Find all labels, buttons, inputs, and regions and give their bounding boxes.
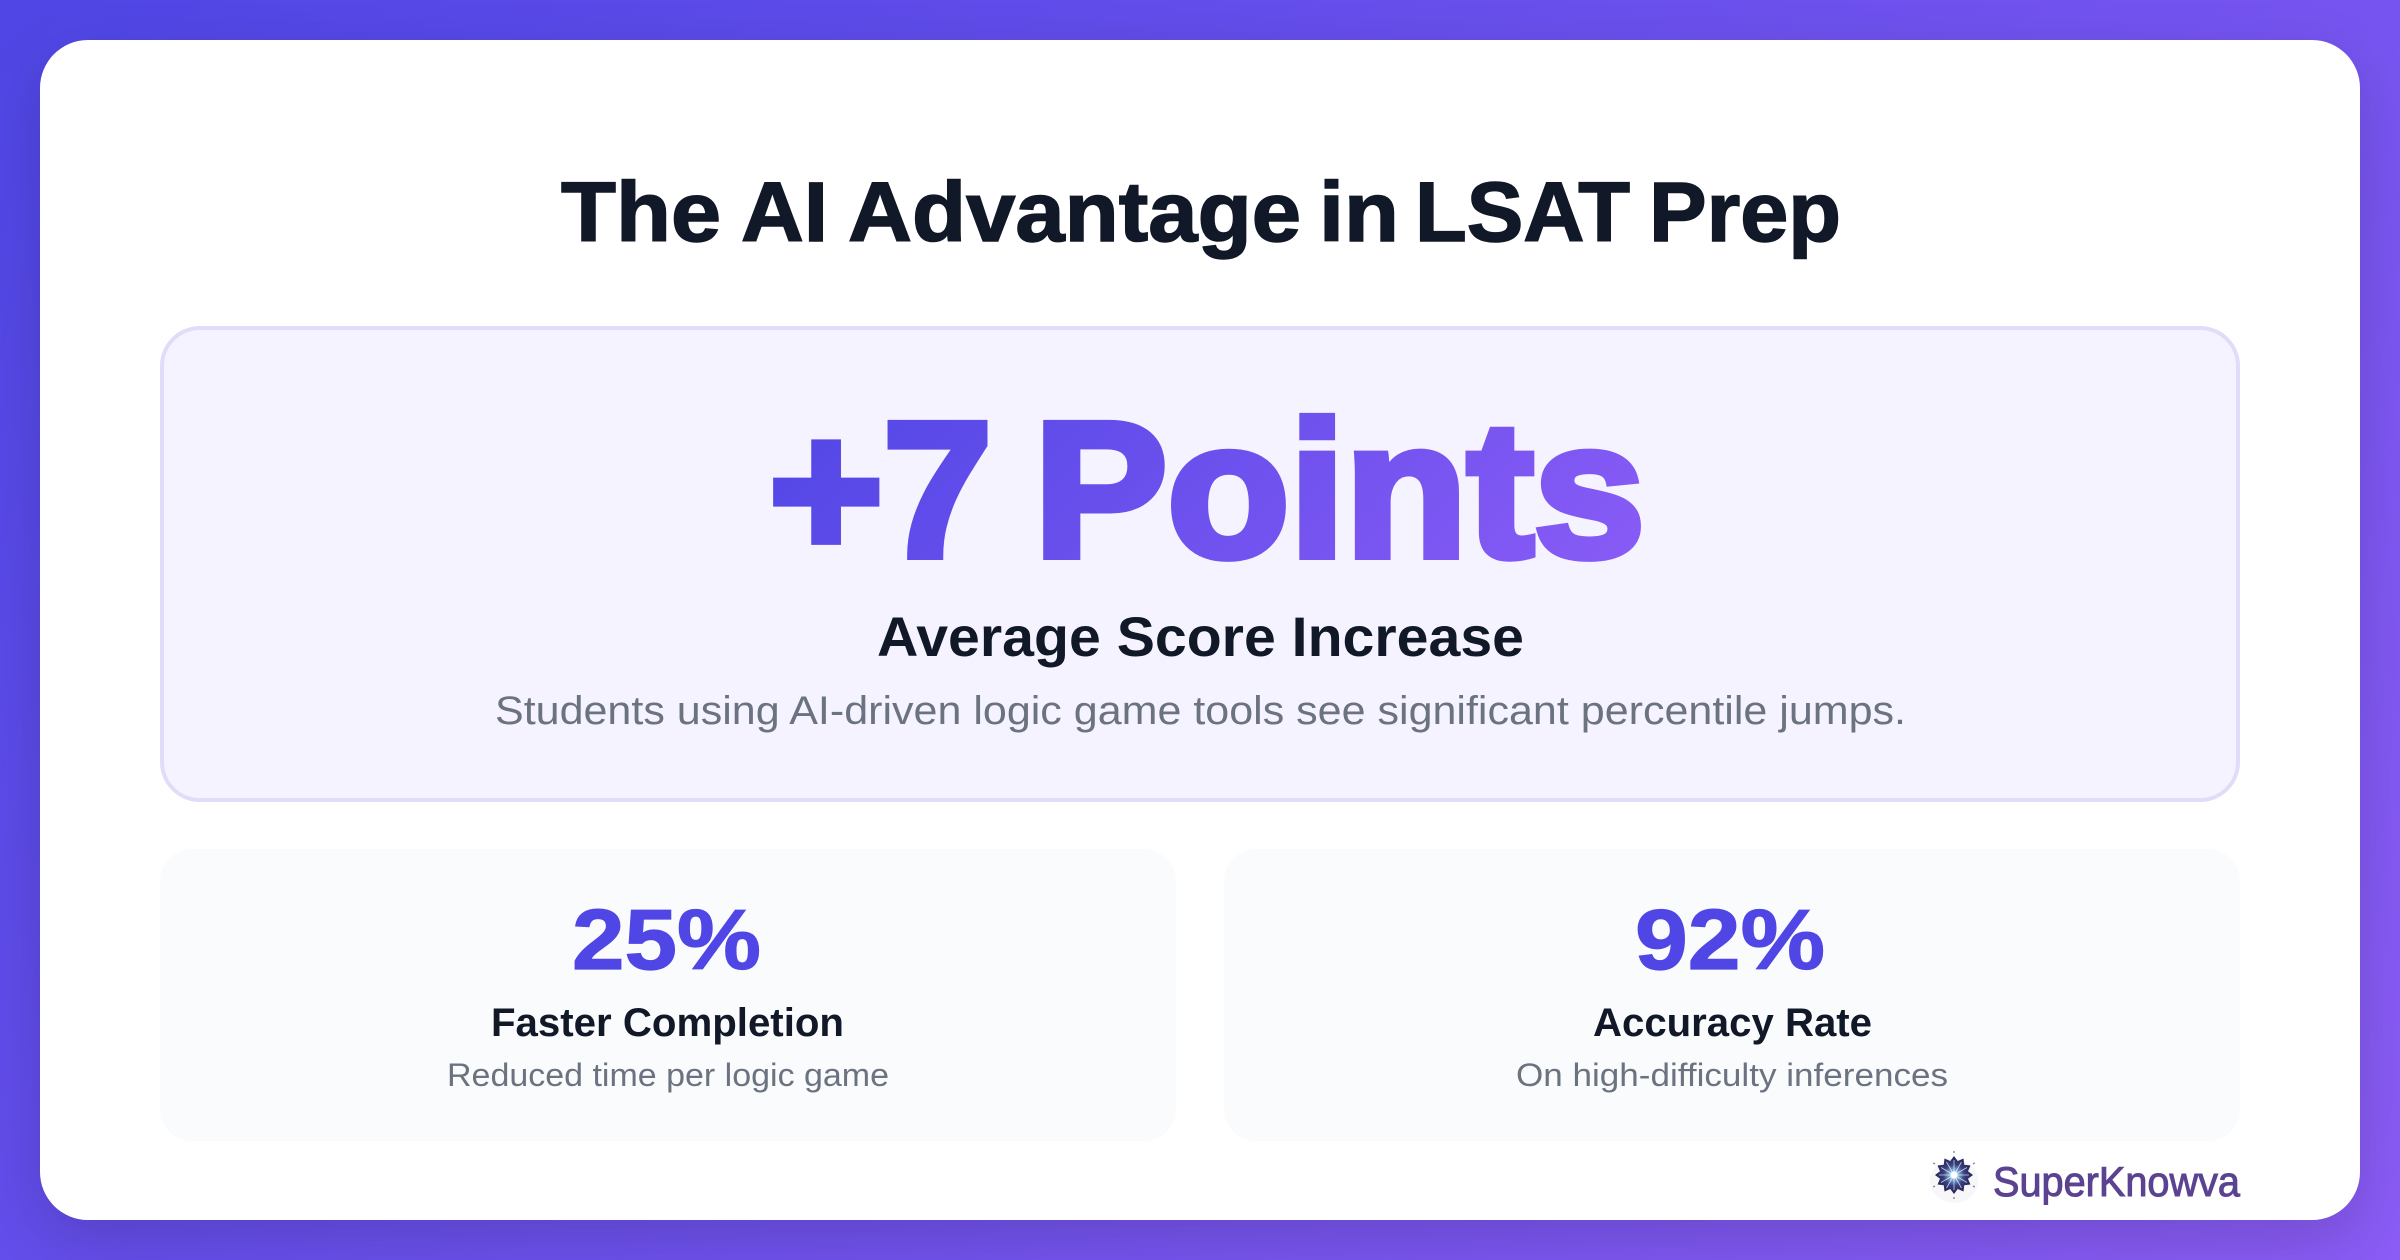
logo wordmark: SuperKnowva <box>1993 1158 2241 1205</box>
hero description: Students using AI-driven logic game tools see significant percentile jumps. <box>495 689 1906 733</box>
stat description: Reduced time per logic game <box>447 1057 889 1093</box>
panel: accuracy rate <box>1224 849 2240 1141</box>
title: in <box>1319 165 1399 259</box>
panel: hero stat <box>162 328 2238 800</box>
title: The <box>561 165 721 259</box>
title: Prep <box>1649 165 1841 259</box>
stat label: Faster Completion <box>491 1001 844 1045</box>
title: Advantage <box>848 165 1301 259</box>
icon: star emblem <box>1930 1151 1978 1203</box>
hero number <box>769 382 1645 597</box>
hero number: +7 <box>769 382 992 597</box>
panel: faster completion <box>160 849 1176 1141</box>
stat: 92%: 92% <box>1635 893 1825 988</box>
hero label: Average Score Increase <box>877 605 1524 668</box>
hero number: Points <box>1034 382 1645 597</box>
title: AI <box>741 165 828 259</box>
title: LSAT <box>1415 165 1630 259</box>
title <box>561 165 1841 259</box>
stat label: Accuracy Rate <box>1593 1001 1872 1045</box>
stat: 25%: 25% <box>572 893 761 988</box>
logo: SuperKnowva <box>1930 1151 2241 1205</box>
stat description: On high-difficulty inferences <box>1516 1057 1948 1093</box>
